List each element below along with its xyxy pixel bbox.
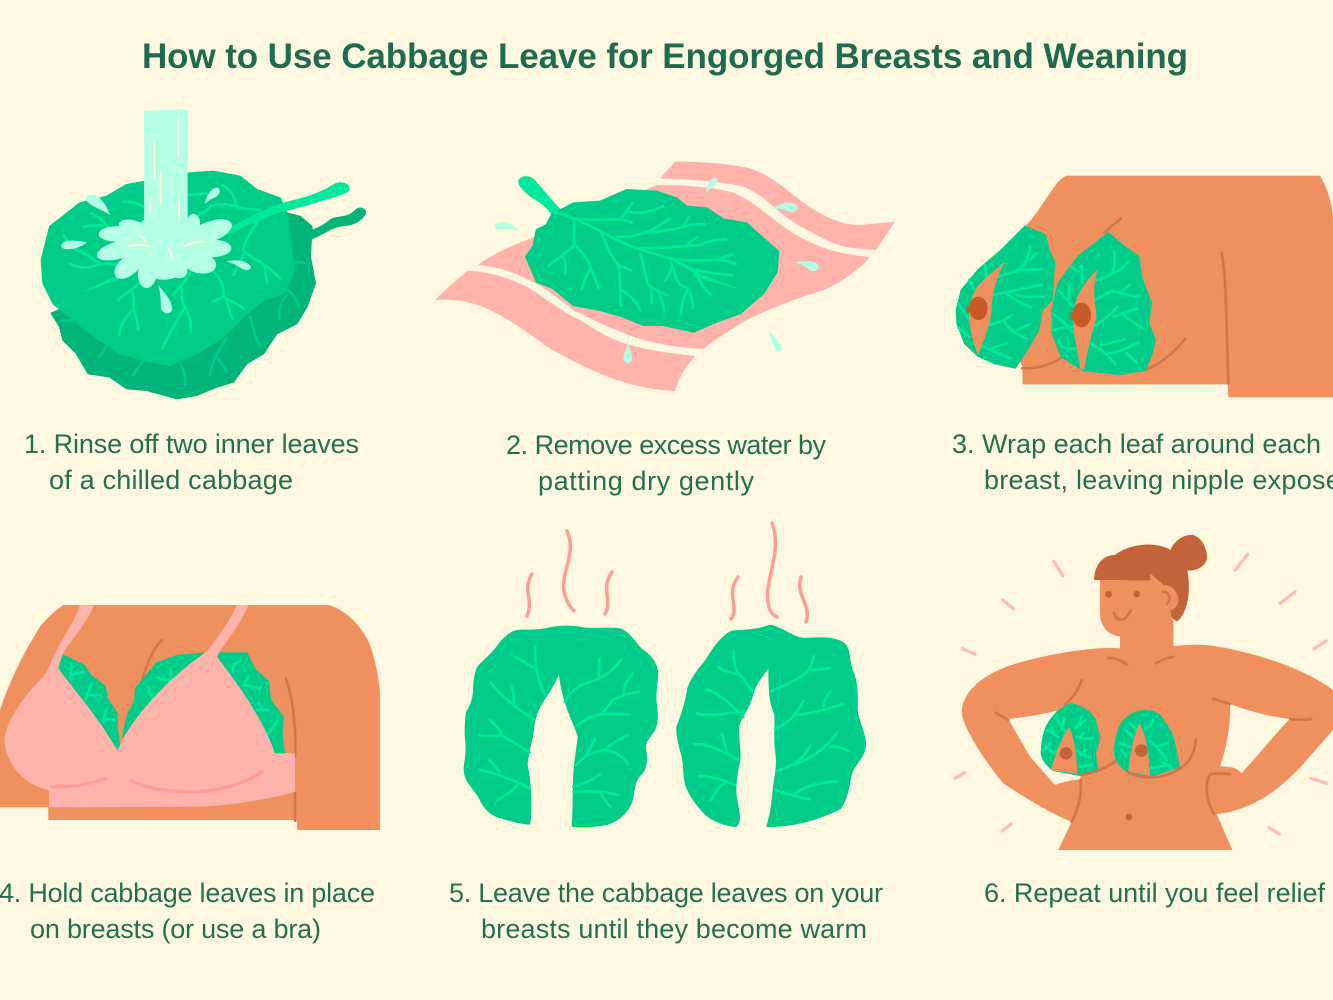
right wrapped leaf [1053, 233, 1155, 374]
bra seam right [131, 772, 262, 792]
illustration: rinsing cabbage leaves [42, 109, 366, 398]
body creases [996, 657, 1311, 822]
caption 1: of a chilled cabbage [49, 465, 293, 495]
illustration: patting leaf dry on towel [435, 162, 895, 391]
back cabbage leaf and dark stem [52, 208, 366, 398]
illustration: warm cabbage leaves [465, 626, 865, 826]
caption 3: 3. Wrap each leaf around each [952, 429, 1321, 459]
torso and arm [0, 605, 380, 830]
leaf veins [958, 246, 1143, 364]
exposed skin wedges [1051, 723, 1150, 776]
illustration: relieved woman [955, 535, 1333, 850]
radiating lines [955, 554, 1327, 834]
caption 4: 4. Hold cabbage leaves in place [0, 878, 375, 908]
illustration: wrapping leaves on breasts [957, 176, 1333, 397]
leaf veins [70, 662, 277, 733]
caption 6: 6. Repeat until you feel relief [984, 878, 1325, 908]
towel [435, 162, 895, 391]
left leaf [465, 627, 657, 826]
body creases [1022, 218, 1228, 383]
hair [1094, 535, 1207, 622]
illustration: bra holding leaves [0, 605, 380, 830]
facial features [1105, 591, 1170, 620]
caption 5: 5. Leave the cabbage leaves on your [449, 878, 883, 908]
leaf veins [548, 203, 740, 315]
bra [4, 605, 295, 807]
caption 1: 1. Rinse off two inner leaves [24, 429, 359, 459]
nipples [967, 297, 1091, 327]
body creases [143, 640, 295, 821]
front cabbage leaf [42, 172, 294, 365]
leaf veins [1043, 717, 1172, 768]
steam [527, 523, 807, 622]
cabbage leaf [526, 190, 778, 332]
face and neck [1100, 573, 1179, 653]
cabbage leaves under bra [58, 653, 284, 755]
title: How to Use Cabbage Leave for Engorged Breasts and Weaning [142, 37, 1188, 76]
front leaf veins and stem [63, 182, 350, 348]
right leaf [677, 626, 865, 826]
left leaf veins [479, 646, 639, 807]
caption 2: 2. Remove excess water by [506, 430, 826, 460]
left wrapped leaf [957, 227, 1054, 368]
leaf stem [518, 176, 561, 215]
splash highlights [129, 234, 203, 258]
exposed skin wedges [969, 262, 1098, 370]
left leaf [1042, 704, 1099, 775]
nipples and navel [1060, 744, 1148, 820]
gaps between arms and torso [1008, 704, 1290, 785]
water droplets [61, 188, 251, 313]
right leaf veins [694, 650, 849, 800]
right leaf [1115, 711, 1179, 776]
water stream [144, 109, 188, 238]
caption 2: patting dry gently [538, 466, 754, 496]
caption 5: breasts until they become warm [481, 914, 867, 944]
water splash [97, 215, 233, 287]
bra seam left [52, 778, 106, 787]
caption 4: on breasts (or use a bra) [30, 914, 321, 944]
droplets [494, 177, 819, 363]
body with arms [962, 645, 1333, 850]
torso [995, 176, 1333, 397]
